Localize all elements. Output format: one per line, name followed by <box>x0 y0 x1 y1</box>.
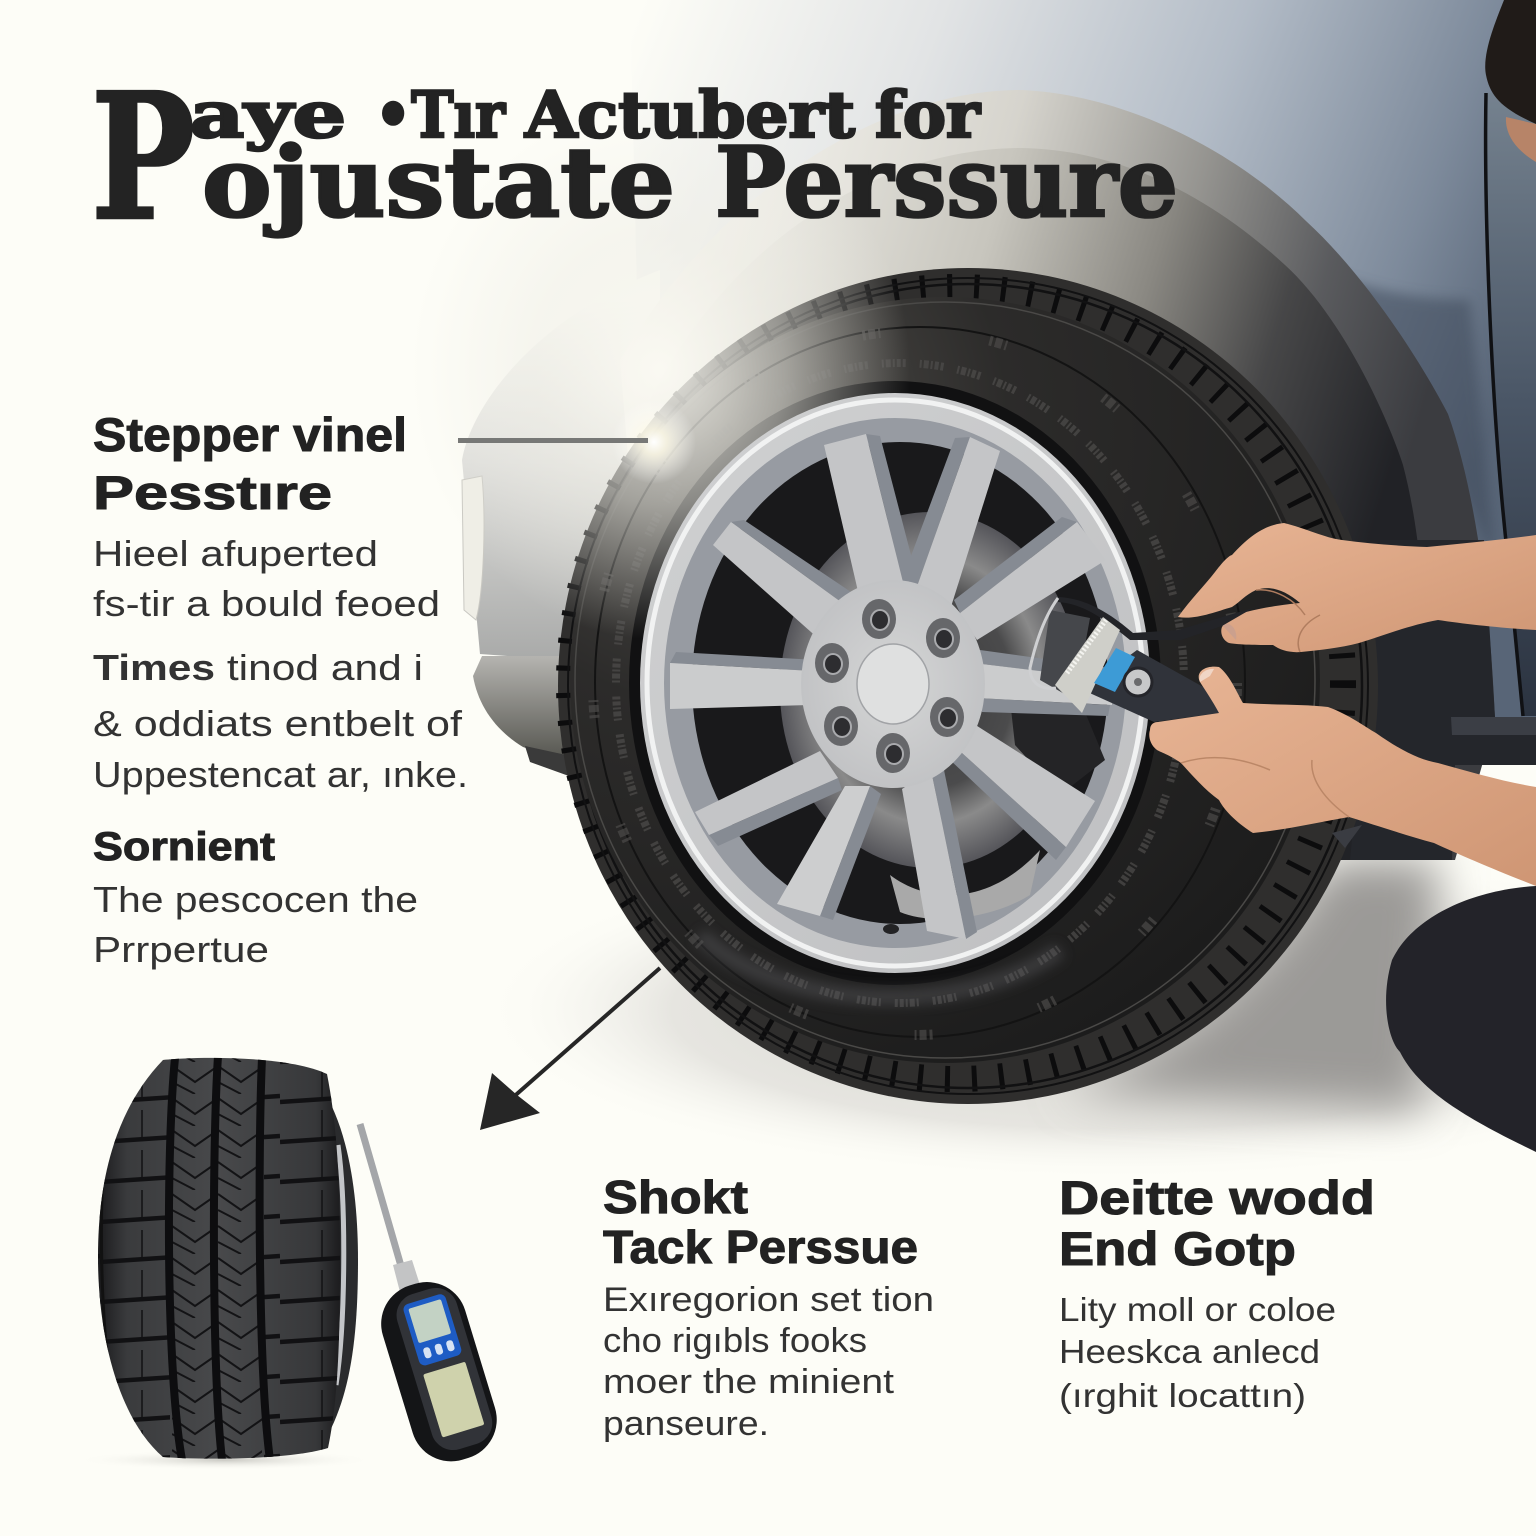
ground and shadow <box>480 840 1536 1180</box>
text block: short tack pressure: Exıregorion set tion <box>603 1281 934 1319</box>
text block: left column: Hieel afuperted <box>93 533 378 574</box>
mud flap <box>525 746 580 780</box>
lower floor reflection <box>890 850 1040 919</box>
text block: end goal: Lity moll or coloe <box>1059 1291 1336 1328</box>
title: for <box>875 78 981 153</box>
main tire <box>558 268 1378 1104</box>
title: Actubert <box>524 78 855 153</box>
text block: left column: fs-tir a bould feoed <box>93 583 440 624</box>
spokes <box>670 434 1112 939</box>
rim barrel <box>664 418 1126 948</box>
bottom sidewall highlight <box>700 935 1060 997</box>
bead ring <box>629 381 1161 985</box>
text block: left column: Times tinod and i <box>93 647 423 688</box>
lower hand <box>1149 667 1536 886</box>
tire fade glow <box>410 100 910 640</box>
text block: short tack pressure: Tack Perssue <box>603 1221 918 1273</box>
wheel opening <box>692 442 1108 924</box>
sidewall <box>570 297 1320 1063</box>
text block: end goal: End Gotp <box>1059 1222 1296 1275</box>
gauge jaw backing <box>1040 610 1090 700</box>
brake caliper <box>1010 700 1105 795</box>
text block: left column: Pesstıre <box>93 466 332 519</box>
tire rear sidewall <box>320 1085 358 1445</box>
valve stem <box>883 924 899 934</box>
title: aye <box>190 78 346 153</box>
gauge case <box>371 1272 507 1471</box>
text block: short tack pressure <box>603 1171 934 1443</box>
door panel <box>1486 90 1536 716</box>
kneeling person's leg <box>1386 886 1536 1152</box>
sidewall lettering band <box>616 363 1184 1003</box>
text block: short tack pressure: cho rigıbls fooks <box>603 1322 867 1360</box>
title: Perssure <box>715 126 1178 239</box>
gauge dial <box>1124 668 1152 696</box>
wire loop <box>1030 598 1058 688</box>
blue button <box>1094 648 1135 692</box>
center cap <box>857 644 929 724</box>
alloy wheel <box>640 393 1150 973</box>
spoke shadows <box>670 434 1110 939</box>
headlight <box>462 476 484 620</box>
lug nuts <box>815 599 964 773</box>
text block: short tack pressure: Shokt <box>603 1171 748 1223</box>
callout line <box>458 438 648 443</box>
front body panel <box>462 270 660 660</box>
title: ojustate <box>202 126 675 239</box>
lower fender trim <box>1350 540 1536 860</box>
serrated jaw <box>1055 617 1120 713</box>
gauge label panel <box>423 1362 484 1438</box>
text block: left column: Uppestencat ar, ınke. <box>93 754 468 795</box>
wheel well <box>650 148 1430 860</box>
text block: end goal: (ırghit locattın) <box>1059 1377 1306 1414</box>
light flare <box>612 400 696 484</box>
wheel hub <box>801 580 985 788</box>
tread grooves <box>569 287 1343 1079</box>
text block: left column <box>93 408 468 970</box>
fender arch <box>620 90 1495 860</box>
person's head <box>1485 0 1536 162</box>
text block: left column: Stepper vinel <box>93 408 407 461</box>
text block: short tack pressure: moer the minient <box>603 1363 895 1401</box>
gauge tail <box>1332 825 1362 848</box>
gauge collar <box>393 1260 420 1292</box>
text block: left column: Sornient <box>93 825 275 869</box>
title: P <box>91 56 195 260</box>
car body <box>462 0 1536 860</box>
text block: left column: & oddiats entbelt of <box>93 703 463 744</box>
upper hand <box>1178 523 1536 652</box>
text block: end goal <box>1059 1171 1375 1414</box>
tire pressure gauge tool <box>1030 597 1362 848</box>
text block: left column: Prrpertue <box>93 929 269 970</box>
body reflection <box>1300 260 1495 560</box>
lower bumper <box>473 656 600 760</box>
title: •Tır <box>375 78 506 153</box>
text block: short tack pressure: panseure. <box>603 1405 769 1443</box>
gauge buttons <box>422 1339 455 1359</box>
tread face <box>98 1058 340 1459</box>
tread pattern <box>98 1056 340 1460</box>
gauge arm <box>1058 597 1253 640</box>
text block: end goal: Deitte wodd <box>1059 1171 1375 1224</box>
gauge screen <box>402 1293 463 1367</box>
title <box>91 56 1178 260</box>
brake disc <box>780 512 1080 868</box>
arrow <box>480 968 660 1130</box>
gauge probe <box>360 1124 401 1266</box>
small digital gauge <box>360 1124 507 1471</box>
text block: left column: The pescocen the <box>93 879 418 920</box>
text block: end goal: Heeskca anlecd <box>1059 1333 1320 1370</box>
gauge body <box>1083 650 1232 722</box>
small tire product <box>98 1058 358 1466</box>
